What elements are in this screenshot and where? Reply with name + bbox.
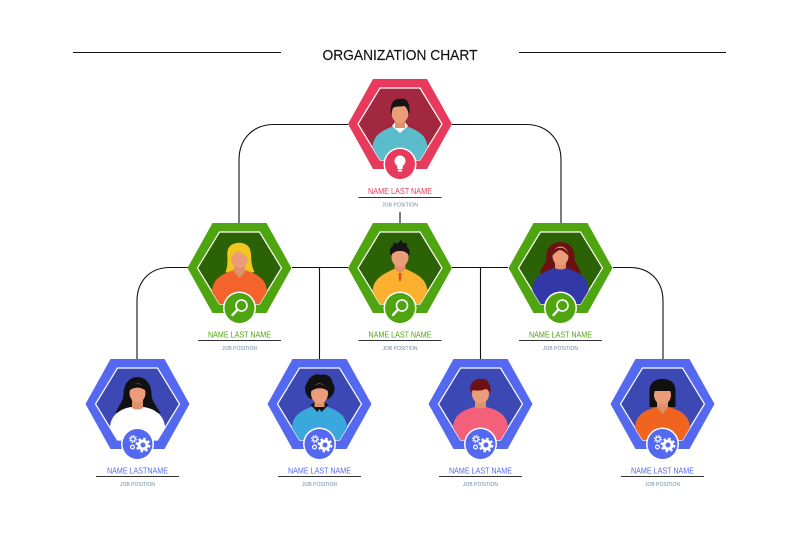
title: ORGANIZATION CHART <box>322 48 478 64</box>
node: top manager: NAME LAST NAME <box>368 186 432 196</box>
node: manager left: JOB POSITION <box>222 346 257 352</box>
node: manager right <box>508 223 612 352</box>
node: staff 1: JOB POSITION <box>120 482 155 488</box>
node: manager left <box>188 223 292 352</box>
person: blonde woman in orange <box>212 242 268 304</box>
icon: gears <box>472 436 492 451</box>
person: woman in white top <box>110 377 165 440</box>
icon: magnifier <box>393 300 408 315</box>
node: manager left: NAME LAST NAME <box>208 330 271 340</box>
person: curly-haired man in blue <box>292 374 348 440</box>
icon: gears <box>130 436 149 451</box>
icon: gears <box>312 436 331 451</box>
node: manager centre: JOB POSITION <box>382 346 418 352</box>
node: staff 2: JOB POSITION <box>302 482 337 488</box>
icon: magnifier <box>232 300 247 315</box>
person: man in teal sweater <box>372 98 428 160</box>
icon: light bulb <box>394 156 406 172</box>
icon: gears <box>654 436 674 451</box>
node: top manager: JOB POSITION <box>382 202 418 208</box>
node: manager right: NAME LAST NAME <box>529 330 592 340</box>
node: staff 3: NAME LAST NAME <box>449 466 512 476</box>
node: staff 1 <box>86 359 190 488</box>
connector lines <box>137 124 663 359</box>
node: manager centre: NAME LAST NAME <box>368 330 432 340</box>
node: staff 3: JOB POSITION <box>463 482 498 488</box>
node: staff 2: NAME LAST NAME <box>288 466 351 476</box>
person: man in pink <box>452 378 508 440</box>
person: woman with black bob in orange <box>634 379 690 440</box>
node: manager centre <box>348 223 452 352</box>
node: top manager <box>348 79 452 208</box>
node: staff 4: NAME LAST NAME <box>631 466 694 476</box>
node: staff 4: JOB POSITION <box>645 482 680 488</box>
node: staff 1: NAME LASTNAME <box>107 466 168 476</box>
node: staff 3 <box>428 359 532 488</box>
person: woman with auburn hair <box>532 242 589 304</box>
node: manager right: JOB POSITION <box>543 346 578 352</box>
person: man in yellow shirt <box>372 240 428 304</box>
node: staff 2 <box>268 359 372 488</box>
icon: magnifier <box>554 300 568 315</box>
node: staff 4 <box>610 359 714 488</box>
